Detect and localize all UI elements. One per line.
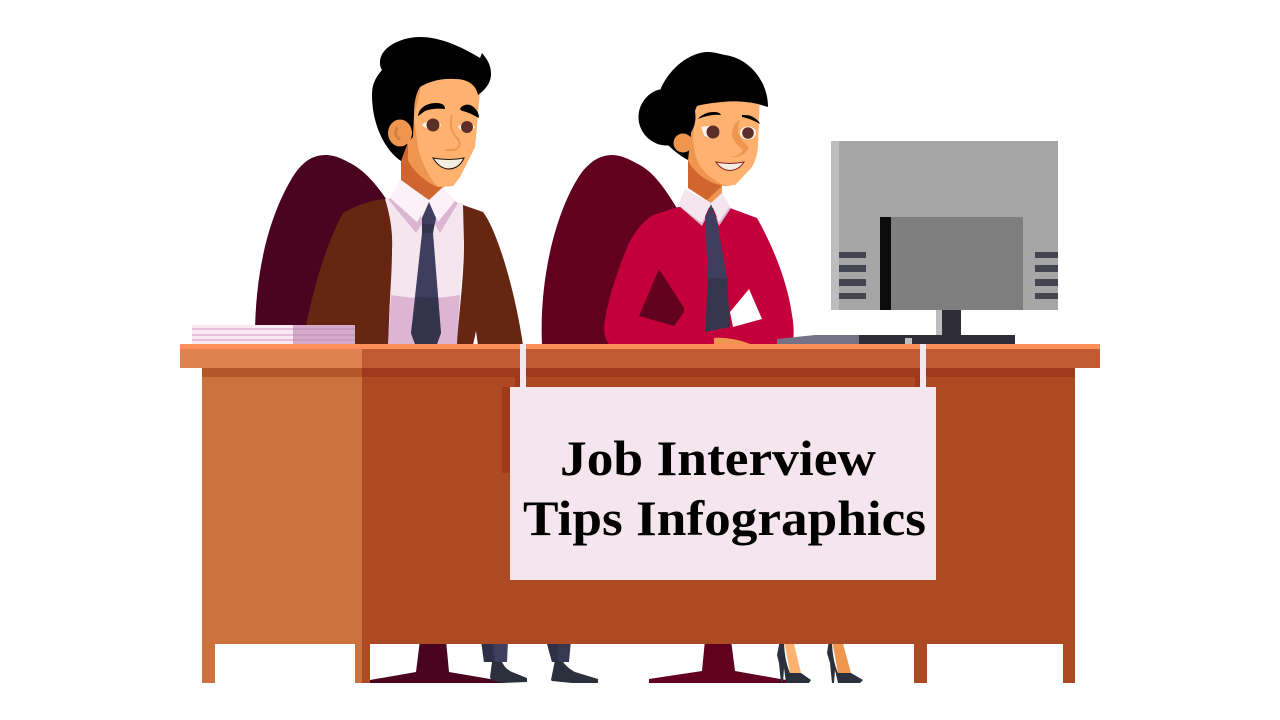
man inner ear: [396, 128, 400, 139]
woman sweater: [604, 207, 794, 345]
desk left legs: [202, 640, 215, 683]
man left eyebrow: [418, 103, 445, 116]
desktop front left: [180, 349, 362, 368]
woman right eye: [740, 126, 756, 140]
woman collar shadow right: [716, 205, 731, 226]
woman hand: [714, 338, 752, 345]
woman neck light: [707, 186, 722, 203]
man jacket right: [457, 205, 523, 345]
monitor base: [859, 335, 1015, 344]
desk: [180, 344, 1100, 683]
desk body right: [362, 377, 1075, 644]
woman tie lower: [705, 278, 730, 332]
monitor: [777, 141, 1058, 344]
stack of papers: [192, 325, 355, 344]
man right eye: [458, 123, 475, 131]
woman face: [693, 90, 760, 185]
woman face shade: [688, 90, 760, 186]
man mouth: [433, 158, 464, 169]
monitor stand highlight: [936, 310, 942, 336]
feet: man's trousers and shoes: [481, 640, 598, 683]
desktop surface: [180, 344, 1100, 349]
chair: woman's chair base: [649, 640, 788, 683]
man face: [414, 70, 480, 187]
man collar shadow left: [388, 197, 424, 233]
feet: woman's legs and heels: [777, 640, 863, 683]
man left eye: [422, 121, 441, 130]
desktop front right: [362, 349, 1100, 368]
woman arm gap: [639, 269, 684, 326]
man collar shadow right: [433, 199, 458, 233]
woman left iris: [706, 126, 720, 138]
man shirt: [385, 199, 464, 345]
woman ear: [674, 134, 692, 152]
woman nose: [731, 120, 749, 157]
woman collar: [678, 189, 730, 223]
man right eyebrow: [460, 105, 479, 118]
monitor panel edge: [880, 217, 891, 310]
sign board: [510, 387, 936, 580]
man tie lower: [411, 297, 441, 344]
woman right iris: [742, 127, 754, 139]
figure: woman: [604, 52, 794, 345]
woman left eye: [701, 126, 720, 138]
desk underside shadow left: [202, 368, 362, 377]
woman paper: [730, 289, 762, 327]
woman tie: [705, 204, 727, 278]
monitor edge: [831, 141, 839, 310]
hanging sign: [510, 344, 936, 580]
chair: woman's chair back: [542, 155, 678, 345]
man tie: [411, 202, 441, 344]
vents left: [839, 252, 866, 299]
man face shade: [408, 75, 480, 187]
woman right eyebrow: [742, 115, 760, 124]
man jacket left: [305, 199, 392, 345]
title: Job Interview: [560, 430, 876, 486]
man collar: [390, 180, 455, 222]
desk body left: [202, 377, 362, 644]
desk right legs: [914, 640, 927, 683]
woman hair bun: [638, 88, 696, 146]
chair: man's chair base: [370, 640, 504, 683]
man hair: [372, 37, 491, 161]
woman collar shadow: [678, 200, 706, 226]
monitor stand: [936, 310, 961, 336]
man left iris: [426, 118, 440, 132]
man tie knot shadow: [422, 224, 434, 233]
woman mouth: [716, 162, 744, 170]
man ear: [388, 120, 412, 146]
figure: man: [305, 37, 523, 345]
keyboard: [777, 335, 859, 344]
title: Tips Infographics: [523, 490, 926, 546]
man shirt shadow: [388, 295, 460, 345]
man right iris: [461, 121, 473, 133]
vents right: [1035, 252, 1058, 299]
chair: man's chair back: [255, 155, 390, 345]
monitor panel: [880, 217, 1023, 310]
base highlight: [905, 338, 912, 344]
woman neck: [688, 150, 722, 203]
woman left eyebrow: [698, 112, 721, 119]
monitor back: [831, 141, 1058, 310]
man nose: [445, 115, 460, 150]
sign straps: [520, 344, 926, 387]
woman hair: [655, 52, 768, 160]
man neck: [401, 140, 450, 201]
desk underside shadow right: [362, 368, 1075, 377]
drawer shadows: [502, 377, 921, 473]
